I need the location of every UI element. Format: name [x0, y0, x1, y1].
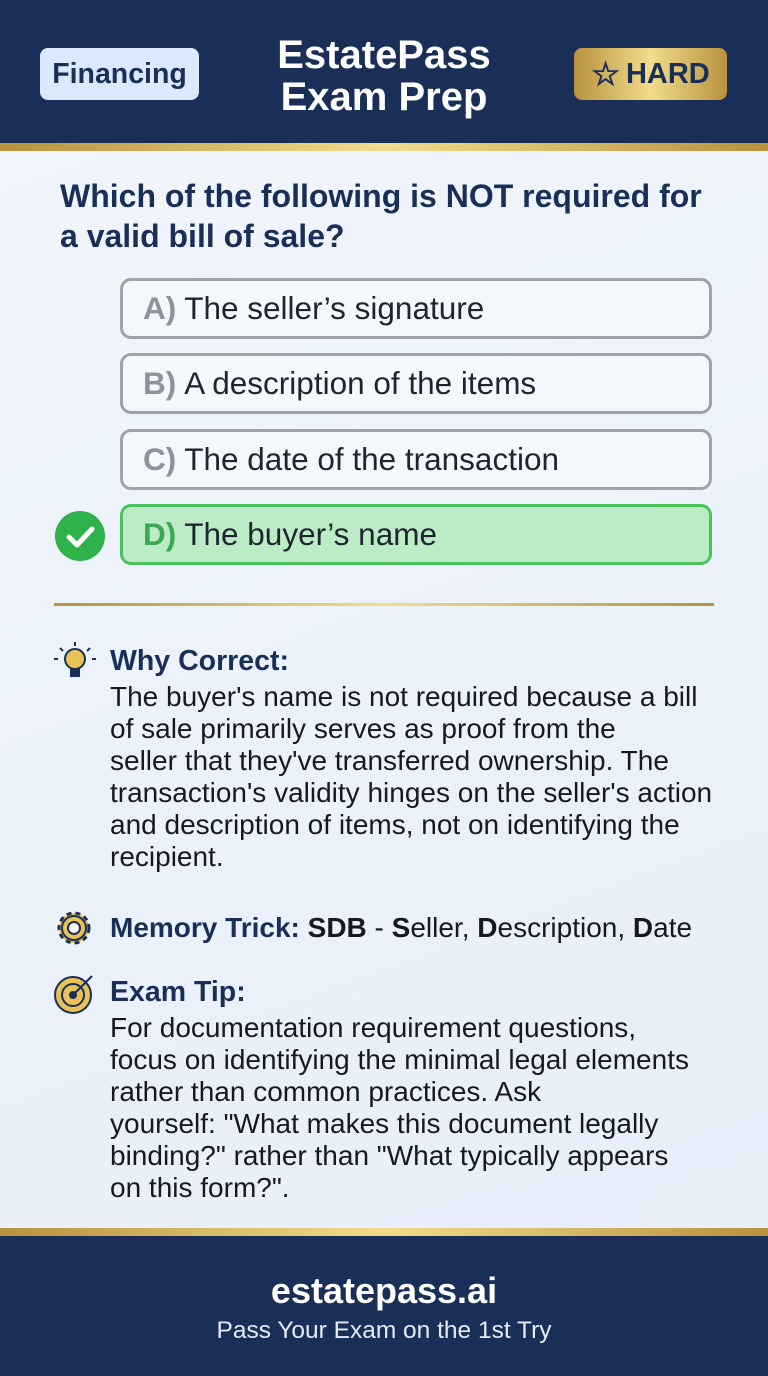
- text: explanation: transaction's validity hinges on the seller's action: [110, 777, 712, 808]
- text: explanation: seller that they've transferred ownership. The: [110, 745, 669, 776]
- footer brand: estatepass.ai: [271, 1270, 497, 1311]
- text: explanation: recipient.: [110, 841, 224, 872]
- option D correct: D): [143, 516, 176, 552]
- question: Which of the following is NOT required for: [60, 178, 702, 214]
- option D correct: [120, 504, 712, 565]
- category badge: [40, 48, 199, 100]
- option A: The seller’s signature: [184, 290, 484, 326]
- title: Exam Prep: [281, 75, 487, 119]
- option B: [120, 353, 712, 414]
- text: exam tip: on this form?".: [110, 1172, 290, 1203]
- option D correct: The buyer’s name: [184, 516, 437, 552]
- title: EstatePass: [277, 33, 491, 77]
- difficulty badge: [574, 48, 727, 100]
- footer: [0, 1236, 768, 1376]
- icon: gear: [58, 912, 90, 944]
- category badge: Financing: [52, 58, 187, 90]
- text: exam tip: focus on identifying the minimal legal elements: [110, 1044, 689, 1075]
- option C: [120, 429, 712, 490]
- text: explanation: of sale primarily serves as proof from the: [110, 713, 616, 744]
- icon: target: [54, 975, 93, 1014]
- icon: check: [55, 511, 105, 561]
- title: [277, 33, 491, 119]
- option C: C): [143, 441, 176, 477]
- text: exam tip: [110, 1012, 689, 1203]
- header gold stripe: [0, 143, 768, 151]
- question: [60, 178, 702, 254]
- memory trick: Memory Trick: SDB - Seller, Description, Date: [110, 912, 692, 943]
- icon: lightbulb: [54, 642, 96, 677]
- difficulty badge: HARD: [626, 58, 710, 90]
- option B: A description of the items: [184, 365, 536, 401]
- text: explanation: The buyer's name is not required because a bill: [110, 681, 697, 712]
- text: explanation: [110, 681, 712, 872]
- footer gold stripe: [0, 1228, 768, 1236]
- difficulty badge: ☆: [591, 56, 620, 92]
- divider: [54, 603, 714, 606]
- text: explanation: and description of items, not on identifying the: [110, 809, 680, 840]
- option B: B): [143, 365, 176, 401]
- text: exam tip: binding?" rather than "What typically appears: [110, 1140, 668, 1171]
- heading: why correct: Why Correct:: [110, 645, 289, 677]
- heading: exam tip: Exam Tip:: [110, 976, 246, 1008]
- option A: A): [143, 290, 176, 326]
- header bar: [0, 0, 768, 144]
- footer tagline: Pass Your Exam on the 1st Try: [216, 1317, 552, 1344]
- option C: The date of the transaction: [184, 441, 559, 477]
- text: exam tip: rather than common practices. Ask: [110, 1076, 541, 1107]
- question: a valid bill of sale?: [60, 218, 345, 254]
- text: exam tip: For documentation requirement questions,: [110, 1012, 636, 1043]
- text: exam tip: yourself: "What makes this document legally: [110, 1108, 658, 1139]
- option A: [120, 278, 712, 339]
